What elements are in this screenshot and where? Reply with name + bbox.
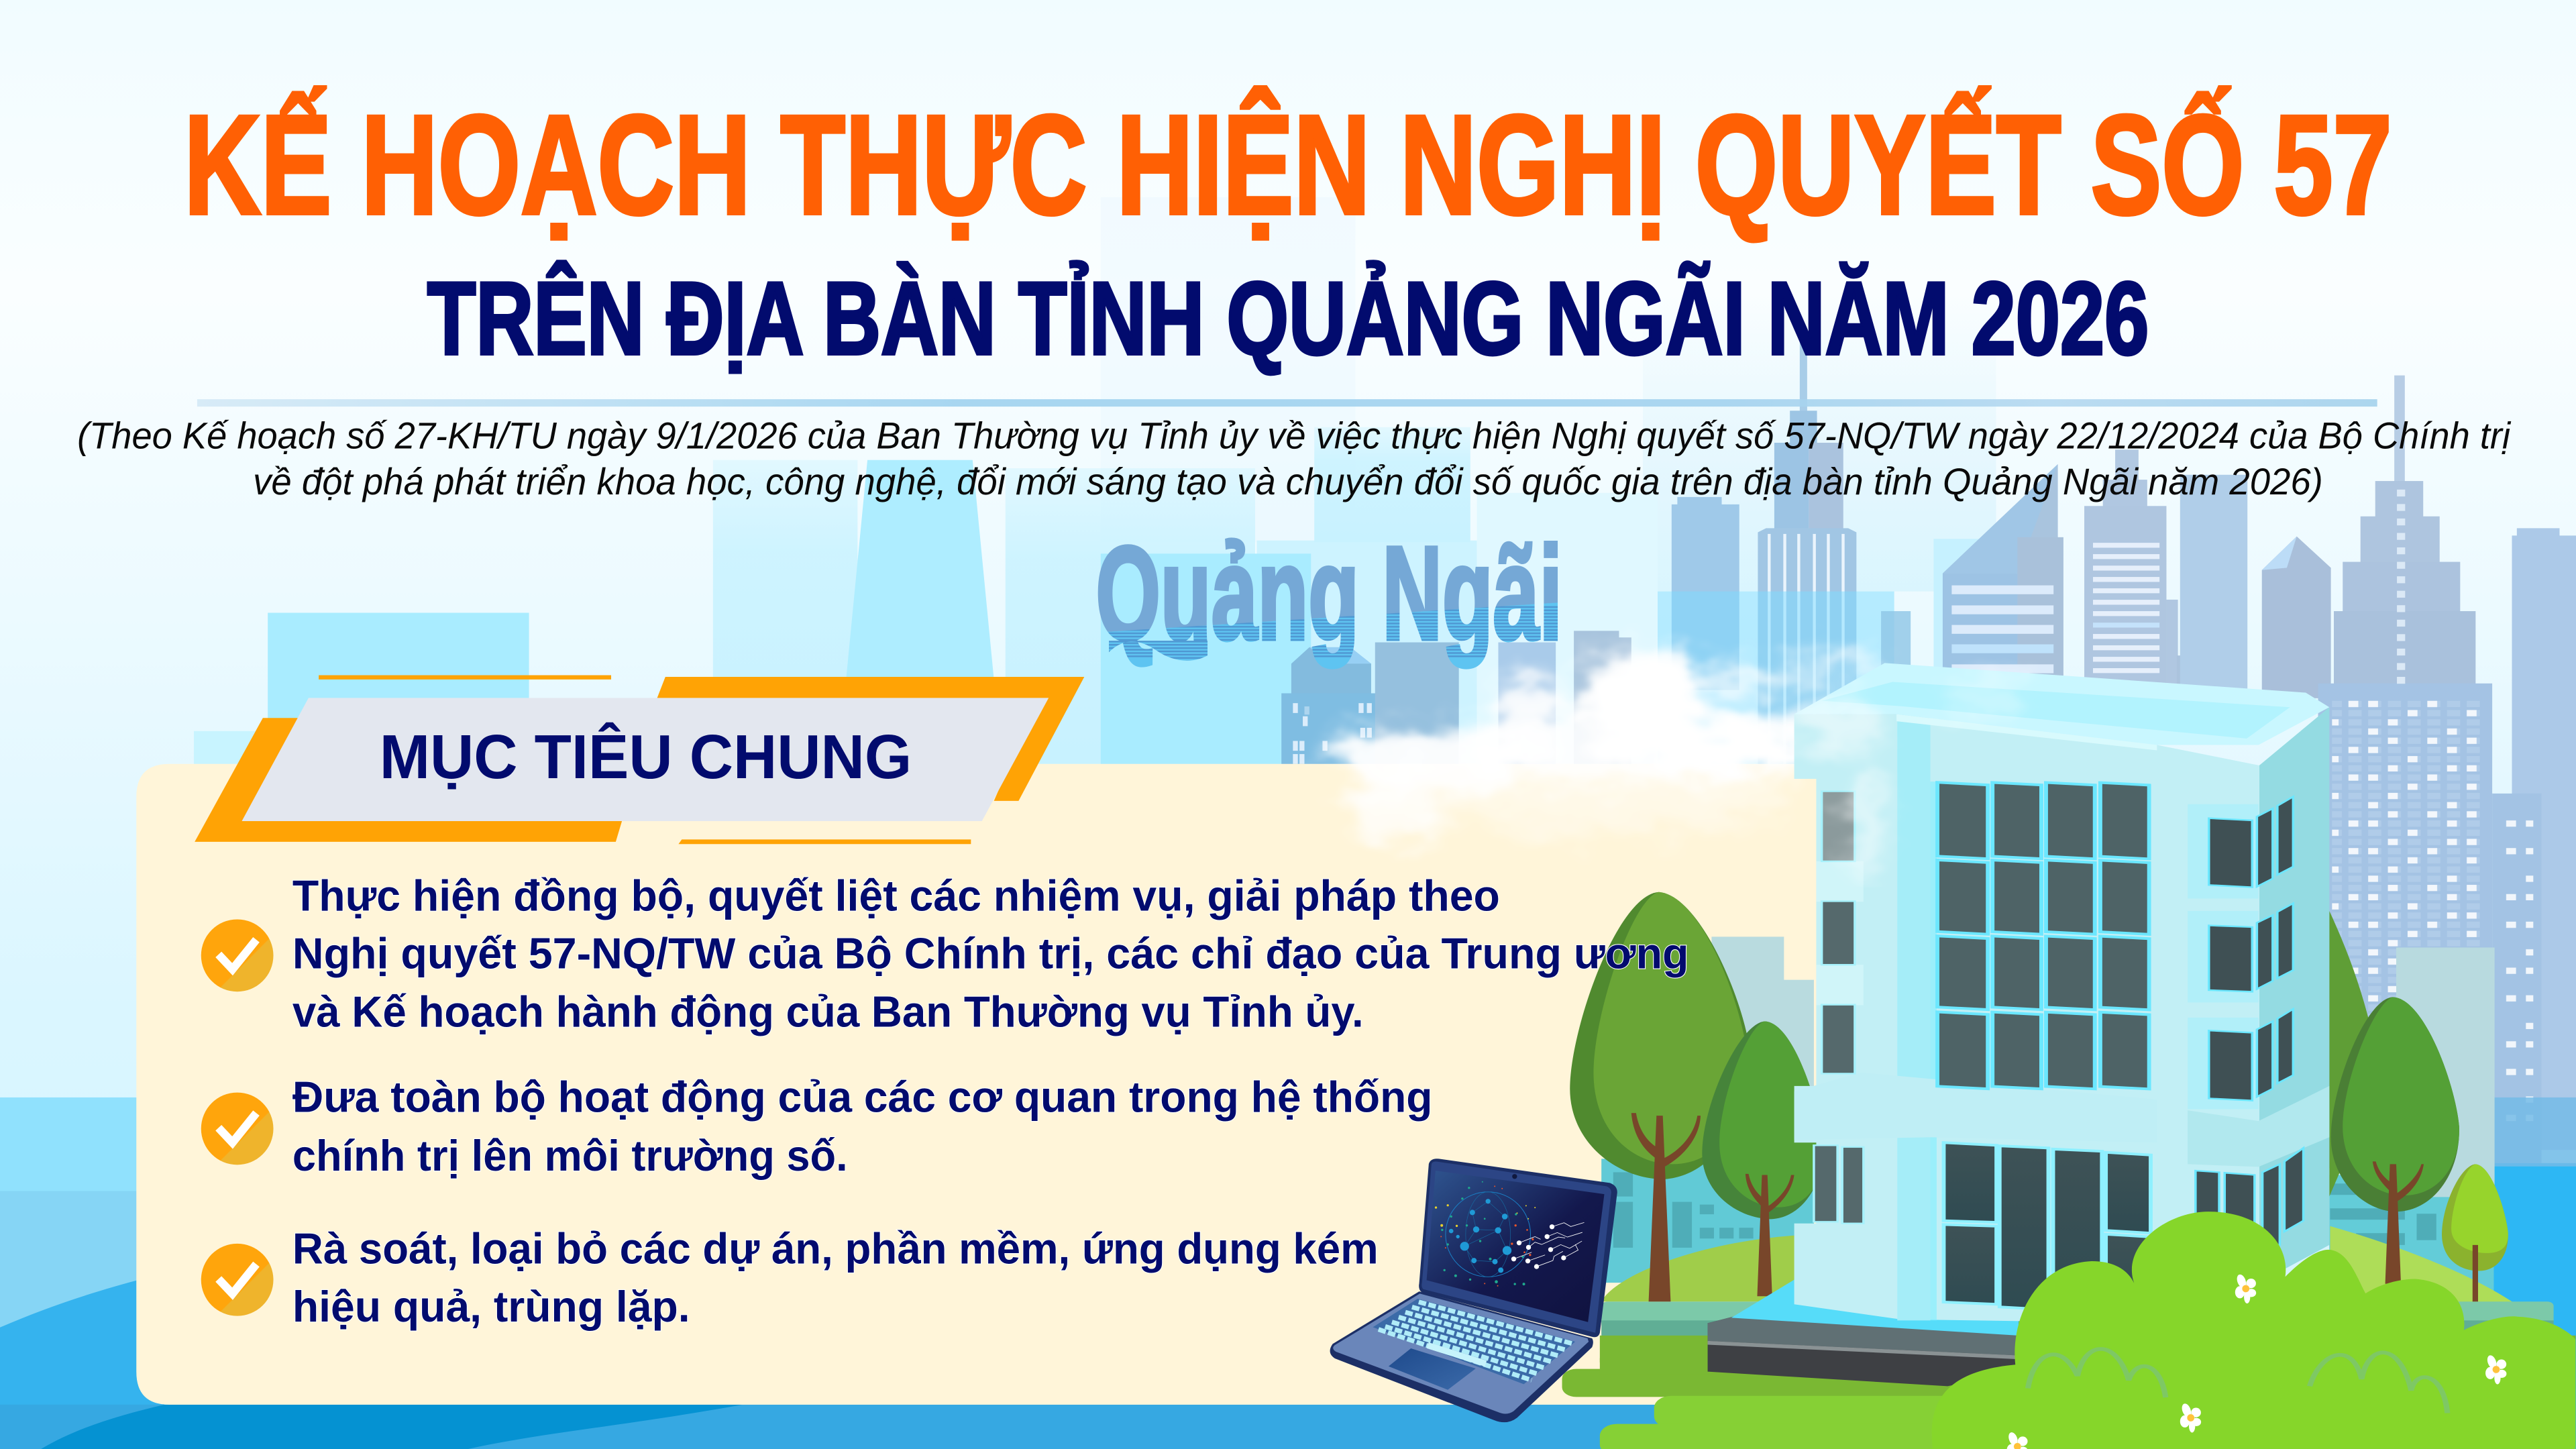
building — [1708, 663, 2329, 1386]
tower G stepped — [2318, 376, 2492, 1168]
item 1: Nghị quyết 57-NQ/TW của Bộ Chính trị, các chỉ đạo của Trung ương — [292, 929, 1689, 978]
ground floor doors — [1943, 1142, 2151, 1315]
ground strip — [1562, 1301, 2575, 1449]
teal background buildings — [1601, 936, 2495, 1299]
skyline grey-blue towers — [1281, 337, 2576, 1168]
green hills — [1601, 1226, 2513, 1302]
keyboard — [1379, 1302, 1572, 1380]
tree right small — [2442, 1164, 2508, 1301]
tree right large — [2331, 997, 2459, 1284]
front windows — [1937, 774, 2149, 1097]
tower A — [1672, 497, 1739, 690]
tree left large — [1570, 892, 1747, 1301]
building base slab — [1708, 1316, 2019, 1386]
divider rule — [197, 399, 2377, 407]
laptop — [1330, 1159, 1617, 1422]
item 2: chính trị lên môi trường số. — [292, 1131, 848, 1180]
item 1 — [201, 871, 1689, 1036]
laptop lid — [1419, 1159, 1617, 1337]
item 1: Thực hiện đồng bộ, quyết liệt các nhiệm vụ, giải pháp theo — [292, 871, 1500, 920]
tower H — [2512, 528, 2576, 1150]
screen globe — [1435, 1181, 1585, 1287]
tower right lower — [2492, 794, 2542, 1163]
item 2 — [201, 1073, 1433, 1180]
bush — [1932, 1212, 2575, 1449]
icon: check 3 — [201, 1244, 274, 1316]
tower F — [2262, 537, 2331, 698]
icon: check 1 — [201, 919, 274, 991]
tree left small — [1702, 1022, 1824, 1296]
source note — [77, 415, 2512, 502]
background skyline pale blue — [194, 197, 2016, 772]
item 3: hiệu quả, trùng lặp. — [292, 1282, 690, 1331]
banner: section heading: MỤC TIÊU CHUNG — [380, 722, 912, 792]
source note: (Theo Kế hoạch số 27-KH/TU ngày 9/1/2026 của Ban Thường vụ Tỉnh ủy về việc thực hiện Nghị quyết số 57-NQ/TW ngày 22/12/2024 của Bộ Chính trị — [77, 415, 2512, 457]
item 1: và Kế hoạch hành động của Ban Thường vụ Tỉnh ủy. — [292, 987, 1364, 1036]
banner: section heading — [195, 676, 1084, 844]
clouds over building — [1787, 682, 2037, 877]
source note: về đột phá phát triển khoa học, công nghệ, đổi mới sáng tạo và chuyển đổi số quốc gia trên địa bàn tỉnh Quảng Ngãi năm 2026) — [253, 461, 2323, 502]
tree behind building — [2329, 911, 2381, 1197]
tower B with needle — [1758, 337, 1856, 772]
scene: trees and building — [1562, 663, 2575, 1449]
circuit traces — [1514, 1222, 1585, 1267]
item 3 — [201, 1224, 1379, 1331]
trackpad — [1389, 1348, 1476, 1390]
item 3: Rà soát, loại bỏ các dự án, phần mềm, ứng dụng kém — [292, 1224, 1379, 1273]
panel: general objectives — [136, 764, 1823, 1405]
building right side — [2259, 707, 2329, 1283]
left wing windows — [1814, 792, 1864, 1224]
building front — [1794, 714, 2259, 1323]
tower near logo — [1281, 631, 1631, 771]
tower C — [1943, 464, 2063, 702]
flowers — [2006, 1273, 2506, 1449]
water and ground at the bottom — [0, 1097, 2576, 1449]
building roof — [1794, 663, 2329, 745]
tower D — [2084, 449, 2193, 696]
right bay windows — [2188, 797, 2304, 1250]
watermark logo: Quảng Ngãi — [1095, 519, 1562, 668]
tower E — [2180, 475, 2247, 696]
icon: check 2 — [201, 1093, 274, 1165]
building ledges — [1816, 861, 1864, 902]
translucent cyan block — [1658, 592, 1894, 772]
item 2: Đưa toàn bộ hoạt động của các cơ quan trong hệ thống — [292, 1073, 1433, 1122]
watermark logo: Quảng Ngãi: Quảng Ngãi — [1095, 519, 1562, 668]
laptop base — [1330, 1291, 1593, 1422]
clouds behind building — [1328, 649, 1881, 841]
